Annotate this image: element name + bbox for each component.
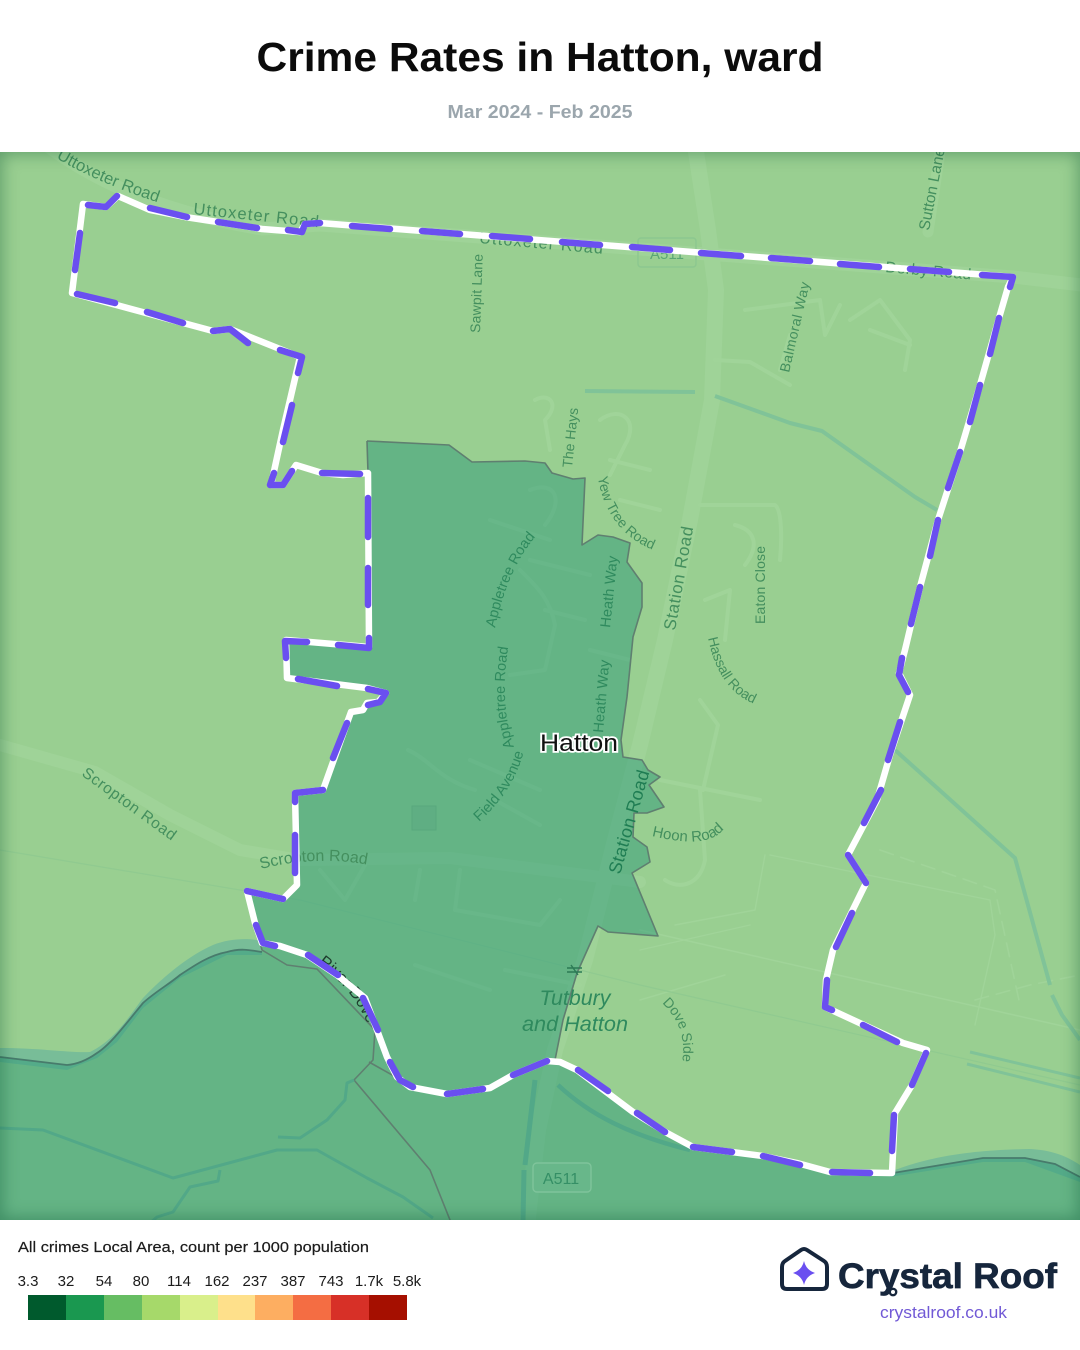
road labels: Hoon Road <box>653 822 724 842</box>
road labels: Scropton Road <box>79 764 179 844</box>
road labels: Hassall Road <box>708 637 757 704</box>
road shield: A511 south: A511 <box>543 1171 579 1188</box>
legend title: All crimes Local Area, count per 1000 population <box>18 1239 369 1256</box>
boundary white base <box>72 196 1013 1173</box>
ward boundary <box>72 196 1013 1173</box>
southern streams <box>0 1080 690 1225</box>
road labels: Scropton Road <box>260 850 368 868</box>
road labels: River Dove <box>322 955 369 1022</box>
logo keyhole accent <box>890 1289 896 1295</box>
place label: Tutbury and Hatton <box>522 990 628 1031</box>
road labels: Yew Tree Road <box>598 476 656 550</box>
residential streets <box>320 300 1080 1030</box>
legend values <box>18 1273 422 1290</box>
map edge shading <box>0 152 1080 1220</box>
legend values: 743 <box>318 1273 344 1290</box>
low crime area polygon <box>0 441 1080 1225</box>
riverside band <box>0 939 1080 1182</box>
icon: house with star <box>782 1249 827 1289</box>
road labels: Heath Way <box>598 554 622 628</box>
road labels: Station Road <box>605 768 653 876</box>
road labels: Eaton Close <box>752 546 768 624</box>
road shield: A511 north <box>638 238 696 267</box>
road labels: Heath Way <box>591 658 613 733</box>
legend values: 54 <box>96 1273 112 1290</box>
legend <box>18 1239 422 1320</box>
road shield: A511 north: A511 <box>650 246 684 263</box>
polygon outline <box>247 441 664 1225</box>
station icon <box>567 965 582 975</box>
road shield: A511 south <box>533 1163 591 1192</box>
road labels: Uttoxeter Road <box>58 152 160 202</box>
road labels: Station Road <box>660 525 697 632</box>
website link: crystalroof.co.uk <box>880 1303 1008 1322</box>
road labels: Appletree Road <box>486 530 535 628</box>
place label: Hatton: Hatton <box>540 730 618 757</box>
logo: Crystal Roof <box>782 1249 1057 1322</box>
road labels: Sutton Lane <box>916 146 949 232</box>
road labels: Derby Road <box>885 259 972 283</box>
legend values: 1.7k <box>355 1273 384 1290</box>
place label: Tutbury and Hatton: Tutbury <box>540 987 612 1010</box>
legend values: 237 <box>242 1273 268 1290</box>
subtitle: date range: Mar 2024 - Feb 2025 <box>448 101 632 122</box>
road labels: Uttoxeter Road <box>479 230 604 258</box>
streams <box>585 391 1080 1092</box>
logo wordmark: Crystal Roof <box>838 1257 1057 1296</box>
road labels: Appletree Road <box>494 646 514 747</box>
road labels: Balmoral Way <box>776 280 813 374</box>
road labels: Sawpit Lane <box>467 253 486 333</box>
road labels <box>58 152 971 1062</box>
legend colour scale <box>28 1295 407 1320</box>
road labels: Dove Side <box>663 997 694 1062</box>
boundary purple dashes <box>75 196 1013 1173</box>
legend values: 387 <box>280 1273 306 1290</box>
map background <box>0 152 1080 1220</box>
legend values: 162 <box>204 1273 230 1290</box>
title: Crime Rates in Hatton, ward <box>256 34 824 80</box>
legend values: 114 <box>167 1273 191 1290</box>
railway line <box>0 850 1080 1085</box>
road labels: The Hays <box>559 407 581 468</box>
legend values: 3.3 <box>18 1273 38 1290</box>
legend values: 5.8k <box>393 1273 422 1290</box>
building block <box>412 806 436 830</box>
legend values: 32 <box>58 1273 74 1290</box>
river line <box>0 950 1080 1177</box>
road labels: Uttoxeter Road <box>193 200 320 231</box>
place label: Tutbury and Hatton: and Hatton <box>522 1013 628 1036</box>
legend values: 80 <box>133 1273 149 1290</box>
road labels: Field Avenue <box>473 752 523 821</box>
